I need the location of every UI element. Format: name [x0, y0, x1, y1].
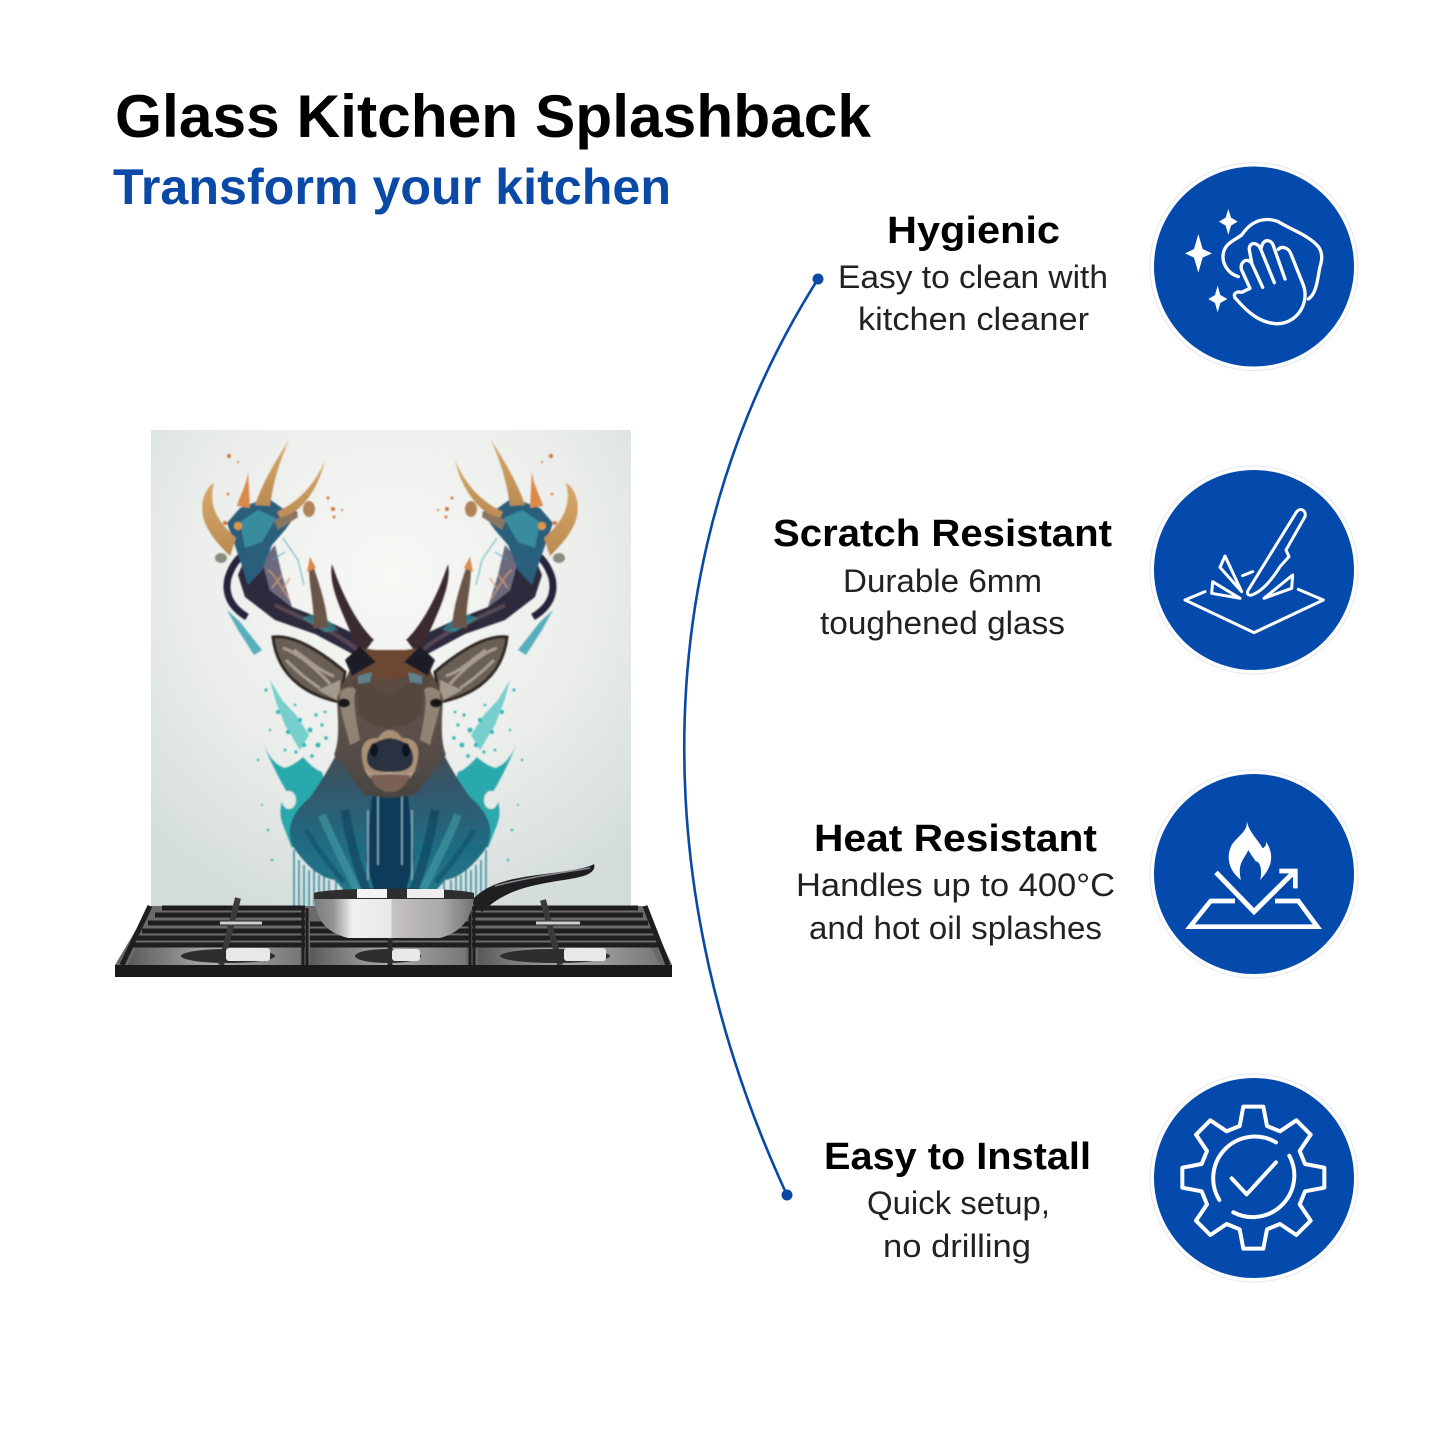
description: kitchen cleaner [858, 301, 1089, 337]
description: and hot oil splashes [809, 910, 1102, 946]
tan tines [255, 440, 289, 506]
burner wells [128, 946, 660, 965]
product image: splashback above gas hob [115, 430, 672, 977]
feature: scratch resistant [773, 466, 1358, 674]
icon: knife on glass surface [1150, 466, 1358, 674]
description: Easy to clean with [838, 259, 1108, 295]
head [334, 648, 390, 798]
gas hob [115, 898, 672, 977]
icon: flame over surface [1150, 770, 1358, 978]
subtitle: Transform your kitchen [113, 159, 671, 215]
description [867, 1185, 1050, 1264]
description [796, 867, 1115, 946]
feature: easy to install [824, 1074, 1358, 1282]
description: Handles up to 400°C [796, 867, 1115, 903]
teal cluster [227, 498, 298, 585]
feature: heat resistant [796, 770, 1358, 978]
heading: Scratch Resistant [773, 513, 1112, 555]
description: toughened glass [820, 605, 1065, 641]
frying pan [314, 864, 594, 938]
burners [181, 923, 610, 963]
icon: hand wiping with sparkles [1150, 162, 1358, 370]
grates [122, 906, 668, 965]
description: Quick setup, [867, 1185, 1050, 1221]
title: Glass Kitchen Splashback [115, 83, 872, 150]
curved connector line with end dots [684, 274, 824, 1200]
feature: hygienic [838, 162, 1358, 370]
description [820, 563, 1065, 641]
inner tines [331, 564, 374, 652]
description: no drilling [883, 1228, 1031, 1264]
description [838, 259, 1108, 337]
heading: Heat Resistant [814, 818, 1097, 860]
splashback panel with stag artwork [151, 430, 631, 920]
ear [273, 637, 345, 702]
antler beam [238, 522, 372, 658]
heading: Hygienic [887, 210, 1060, 252]
description: Durable 6mm [843, 563, 1042, 599]
heading: Easy to Install [824, 1136, 1091, 1178]
icon: gear with check [1150, 1074, 1358, 1282]
